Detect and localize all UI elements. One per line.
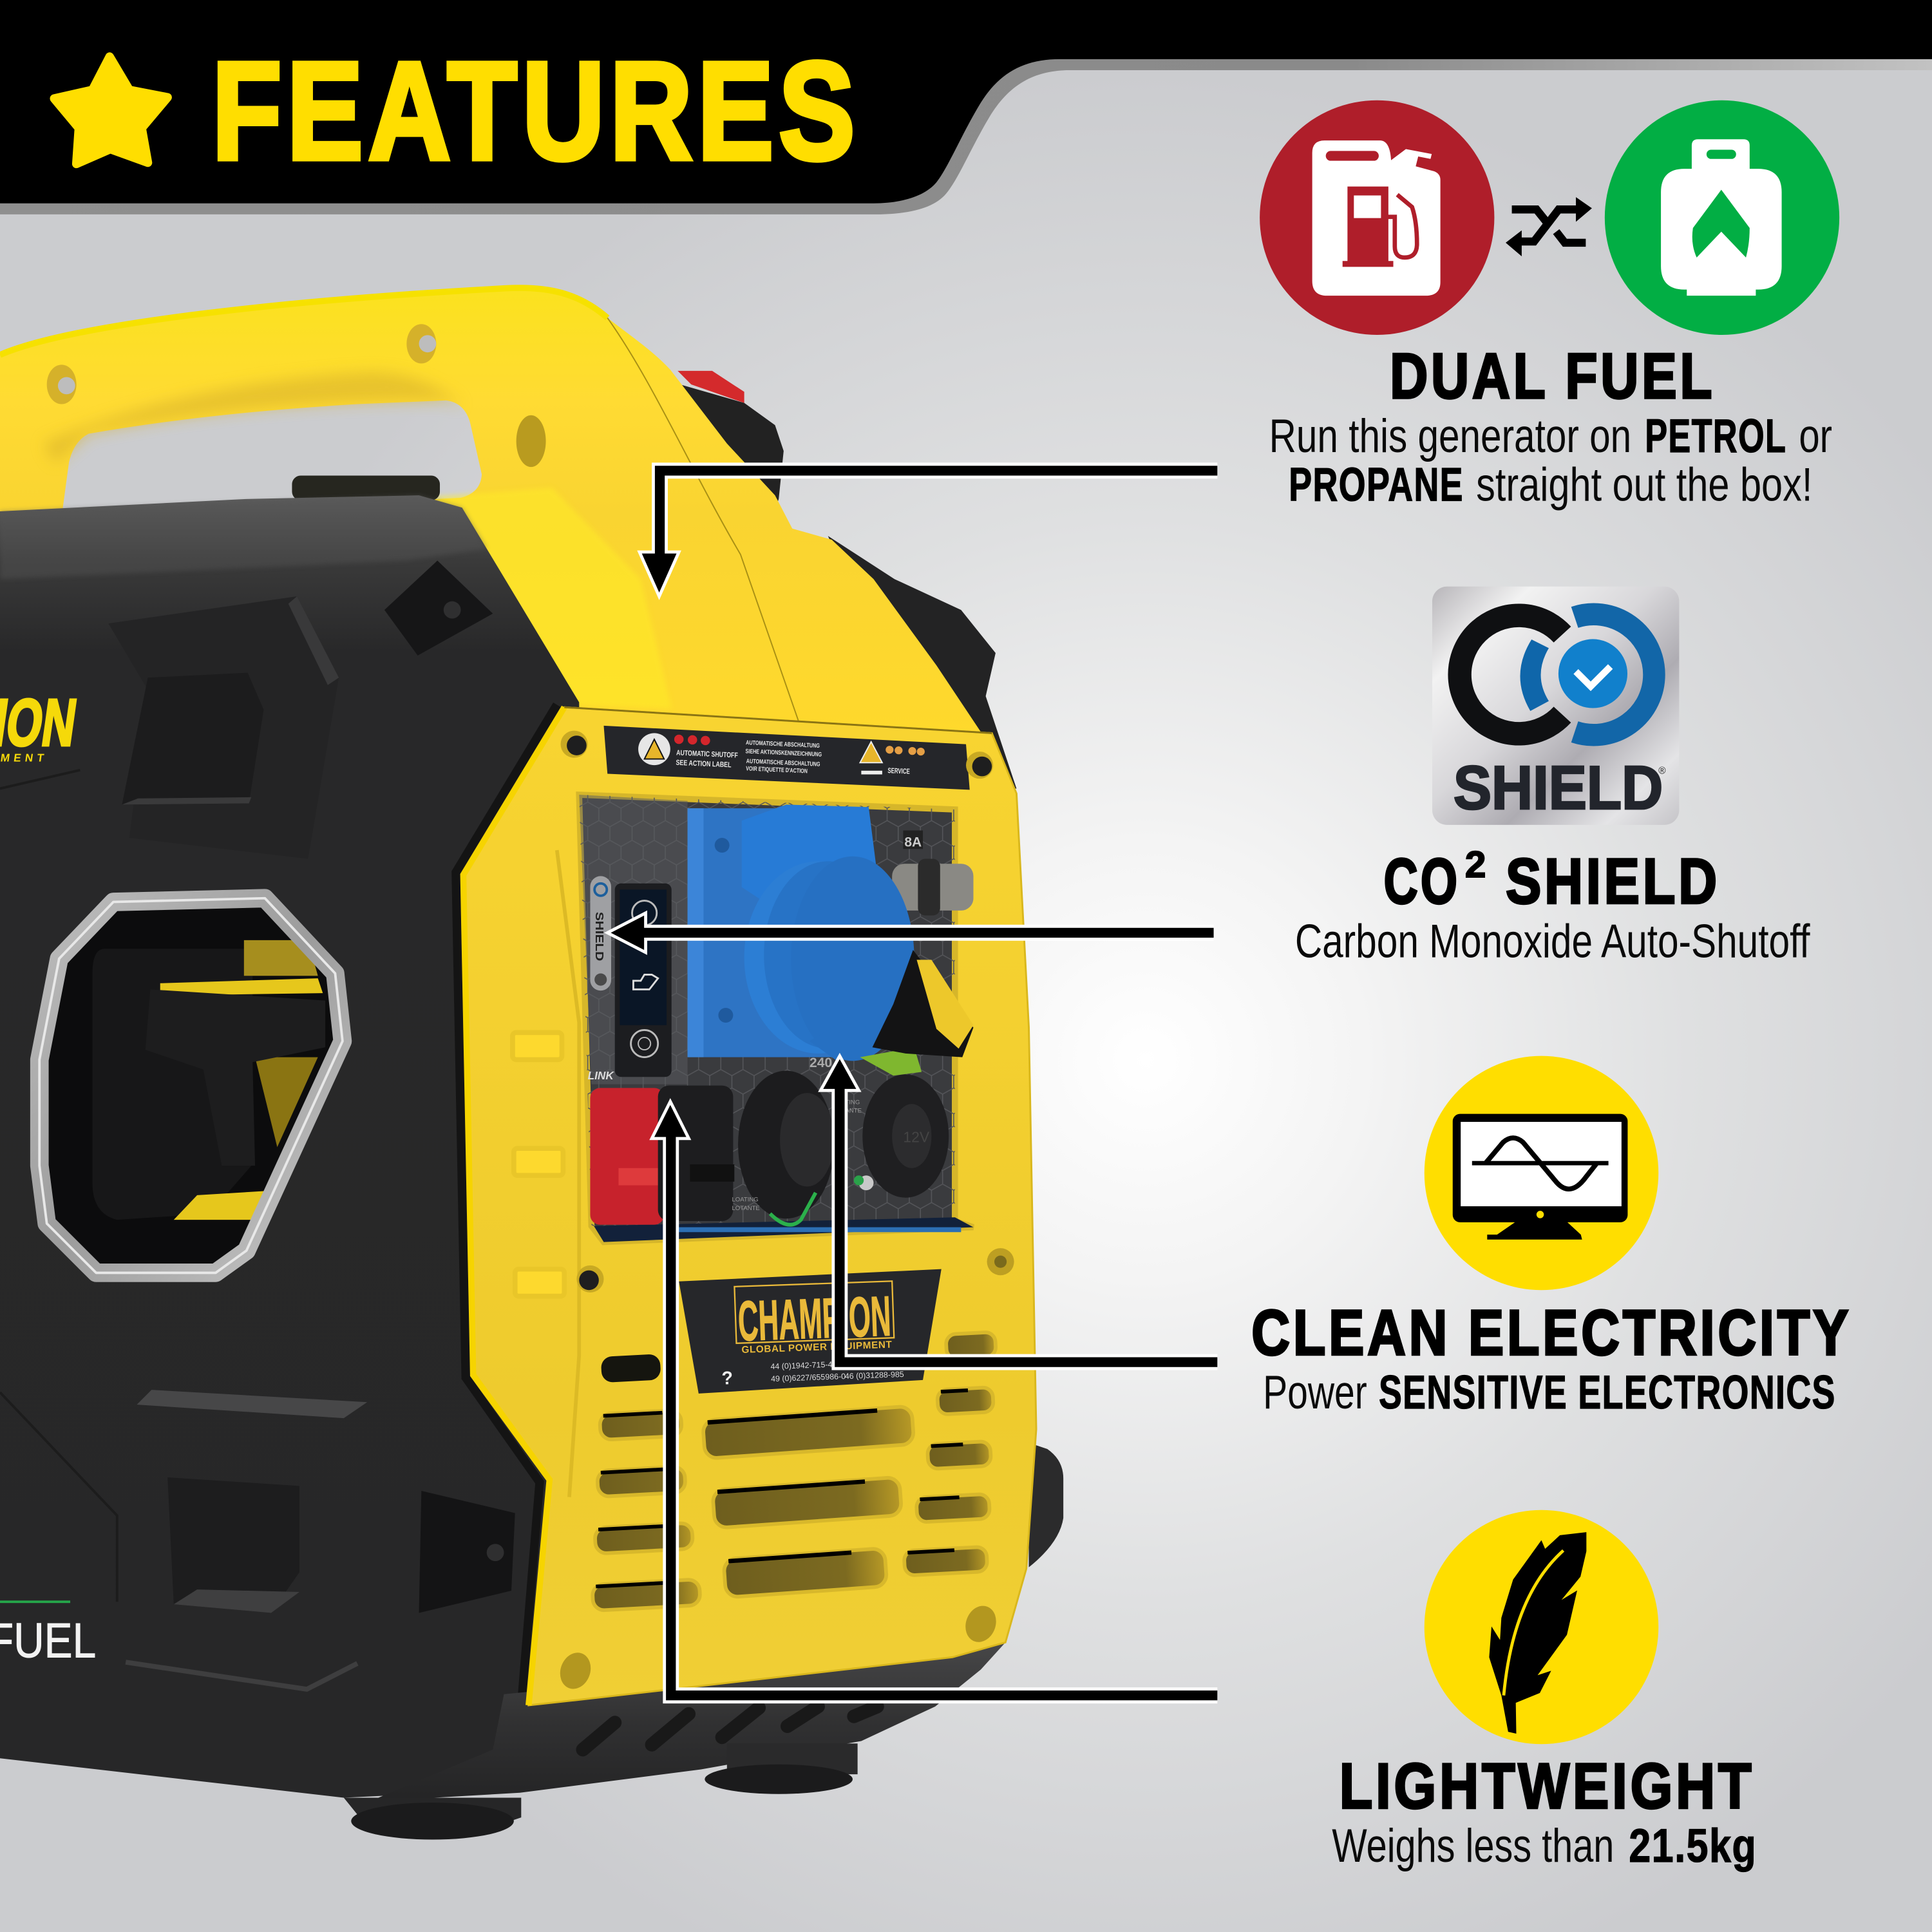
heading: CO2 shield: CO (1384, 846, 1460, 917)
upper screw tab (384, 561, 493, 656)
heading: CO2 shield (1384, 844, 1720, 917)
twist-lock outlet (738, 1056, 834, 1225)
upper panel recess (108, 596, 339, 859)
icon: petrol can (1260, 100, 1494, 335)
feature: clean electricity (1251, 1056, 1852, 1419)
arrow: CO shield (607, 913, 1214, 952)
header banner (0, 0, 1932, 214)
12V outlet (862, 1074, 949, 1198)
yellow handle and top (0, 288, 986, 739)
description: dual fuel: PETROL (1645, 409, 1786, 462)
nameplate: 46 (0)31288-985 (845, 1370, 904, 1381)
badge: CO shield logo: SHIELD (1454, 753, 1663, 822)
description: dual fuel: Run this generator on (1269, 409, 1631, 462)
red outlet (590, 1088, 664, 1225)
arrow: dual fuel (639, 471, 1217, 596)
recess small text: LOATING (732, 1196, 759, 1203)
feature: lightweight (1332, 1510, 1757, 1872)
label text: VOIR ETIQUETTE D'ACTION (746, 765, 808, 775)
rubber foot right (705, 1743, 858, 1794)
link label: LINK (588, 1069, 614, 1082)
side logo (0, 686, 81, 764)
recess small text: LOTANTE (732, 1205, 760, 1212)
panel rim (463, 707, 564, 1705)
arrow: lightweight (652, 1101, 1217, 1696)
yellow front panel (463, 707, 1036, 1705)
handle rim highlight (0, 288, 607, 355)
top seam (564, 707, 992, 733)
label text: SIEHE AKTIONSKENNZEICHNUNG (745, 748, 822, 759)
title: FEATURES (212, 33, 860, 189)
warning icons (638, 733, 882, 773)
ground stud (854, 1175, 874, 1190)
lower screw tab (419, 1491, 515, 1613)
shell edge by panel (456, 705, 557, 1707)
yellow switch lever (860, 950, 973, 1075)
rubber foot left (344, 1797, 521, 1840)
generator illustration (0, 288, 1063, 1840)
long rib (557, 850, 579, 1497)
recess small text: TING (845, 1099, 860, 1106)
recess small text (732, 1099, 862, 1212)
red stop knob (677, 371, 784, 542)
circuit breaker (892, 831, 973, 916)
nameplate: ? (721, 1368, 734, 1389)
recoil handle (146, 989, 325, 1166)
blue socket (688, 804, 914, 1063)
heading: CO2 shield: SHIELD (1506, 846, 1720, 917)
icon: star (54, 57, 167, 164)
shield badge strip (590, 876, 611, 990)
nameplate: 44 (0)1942-715-407 (770, 1359, 842, 1371)
label text: AUTOMATISCHE ABSCHALTUNG (746, 739, 820, 750)
status label strip (604, 726, 970, 790)
cooling vents (592, 1332, 996, 1611)
label text (676, 736, 911, 779)
badge: CO shield logo (1432, 587, 1679, 825)
label text: SEE ACTION LABEL (676, 759, 732, 769)
label text: SERVICE (887, 767, 910, 776)
icon: monitor with sine wave (1425, 1056, 1658, 1290)
bottom shell (370, 1642, 1005, 1801)
description: lightweight: Weighs less than (1332, 1819, 1614, 1872)
icon: swap arrows (1506, 197, 1592, 256)
icon: feather (1425, 1510, 1658, 1744)
nameplate: 49 (0)6227/655986-0 (771, 1372, 846, 1383)
feature: CO shield (1295, 587, 1810, 968)
twist-lock outlet: 240 (810, 1056, 832, 1070)
lower panel facets (0, 770, 367, 1689)
12V outlet: 12V (903, 1129, 930, 1146)
badge: CO shield logo: ® (1658, 766, 1666, 777)
shield badge strip: SHIELD (593, 912, 606, 961)
nameplate: GLOBAL POWER EQUIPMENT (741, 1340, 893, 1356)
nameplate: CHAMPION (737, 1284, 892, 1353)
black outlet (658, 1086, 734, 1221)
description: dual fuel (1269, 409, 1832, 511)
label text: AUTOMATIC SHUTOFF (676, 749, 738, 760)
rear black housing (828, 536, 1016, 788)
heading: CO2 shield: 2 (1465, 844, 1486, 886)
top facet (0, 495, 487, 579)
description: dual fuel: PROPANE (1289, 458, 1464, 511)
description: CO shield: Carbon Monoxide Auto-Shutoff (1295, 914, 1810, 968)
panel ribs (513, 1032, 564, 1296)
description: clean electricity (1263, 1365, 1836, 1419)
bottom slot (594, 1217, 973, 1242)
black side shell (0, 495, 591, 1797)
seam line (607, 318, 799, 721)
LED indicator panel (615, 884, 672, 1077)
feature: dual fuel (1260, 100, 1839, 511)
recess small text: ANTE (845, 1108, 862, 1115)
arrow: clean electricity (820, 1056, 1217, 1362)
description: dual fuel: or (1799, 409, 1832, 462)
rear foot block (1029, 1443, 1063, 1567)
icon: propane tank (1605, 100, 1839, 335)
circuit breaker: 8A (904, 835, 922, 849)
description: lightweight: 21.5kg (1629, 1819, 1757, 1872)
label text: AUTOMATISCHE ABSCHALTUNG (746, 758, 820, 768)
heading: dual fuel: DUAL FUEL (1390, 341, 1715, 412)
control recess (579, 795, 973, 1242)
description: dual fuel: straight out the box! (1476, 458, 1812, 511)
panel screws (555, 731, 1014, 1693)
description: clean electricity: Power (1263, 1365, 1367, 1419)
nameplate (679, 1269, 942, 1394)
base vents (583, 1707, 877, 1750)
handle screw recesses (47, 324, 546, 467)
bright facet (433, 488, 672, 708)
pull-start window (39, 898, 343, 1273)
heading: lightweight: LIGHTWEIGHT (1340, 1751, 1754, 1823)
filler cap (292, 476, 440, 500)
indicator lights (674, 735, 925, 755)
handle shading (43, 372, 463, 463)
